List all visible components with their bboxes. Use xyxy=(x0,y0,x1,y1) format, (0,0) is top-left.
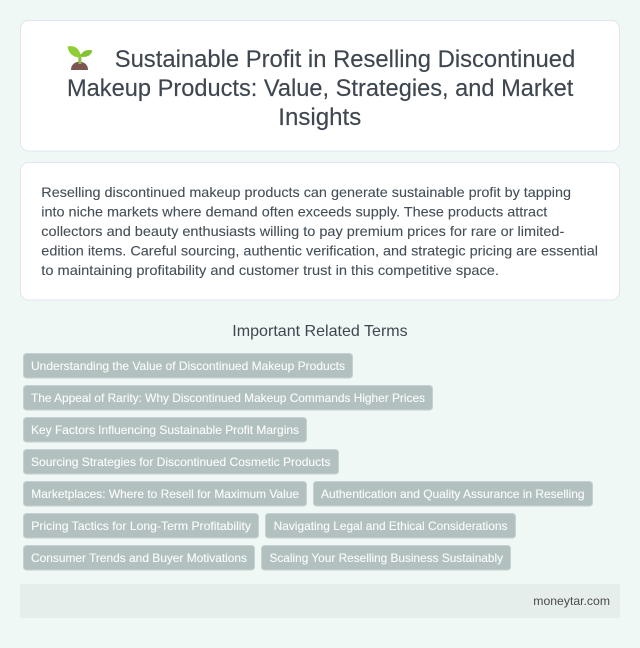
tag xyxy=(24,386,432,410)
tag: The Appeal of Rarity: Why Discontinued Makeup Commands Higher Prices xyxy=(31,391,425,405)
tag: Sourcing Strategies for Discontinued Cosmetic Products xyxy=(31,455,330,469)
heading: title: Sustainable Profit in Reselling Discontinued xyxy=(115,46,575,73)
heading: important related terms: Important Related Terms xyxy=(232,323,408,340)
tag xyxy=(24,450,338,474)
panel: title card xyxy=(20,20,620,151)
footer xyxy=(20,584,620,618)
tag: Key Factors Influencing Sustainable Profit Margins xyxy=(31,423,299,437)
tag: Understanding the Value of Discontinued Makeup Products xyxy=(31,359,345,373)
tag xyxy=(24,354,352,378)
tag xyxy=(266,514,516,538)
tag: Scaling Your Reselling Business Sustainably xyxy=(270,551,503,565)
text block: description: collectors and beauty enthusiasts willing to pay premium prices for rare or limited- xyxy=(41,223,565,239)
tag: Navigating Legal and Ethical Considerations xyxy=(274,519,508,533)
text block: description xyxy=(41,184,598,278)
tag: Marketplaces: Where to Resell for Maximum Value xyxy=(31,487,299,501)
tag: Authentication and Quality Assurance in Reselling xyxy=(321,487,584,501)
heading: title xyxy=(67,46,575,131)
tag: Pricing Tactics for Long-Term Profitability xyxy=(31,519,251,533)
tag xyxy=(24,418,306,442)
footer: moneytar.com xyxy=(533,594,610,608)
tag xyxy=(24,482,306,506)
text block: description: into niche markets where demand often exceeds supply. These products attract xyxy=(41,204,547,220)
heading: title: Makeup Products: Value, Strategies, and Market xyxy=(67,75,574,102)
tag xyxy=(24,546,254,570)
tag xyxy=(262,546,510,570)
text block: description: Reselling discontinued makeup products can generate sustainable profit by tapping xyxy=(41,184,571,200)
heading: title: Insights xyxy=(278,104,361,131)
panel: related term tags xyxy=(24,354,592,570)
panel: description card xyxy=(20,162,620,300)
tag: Consumer Trends and Buyer Motivations xyxy=(31,551,247,565)
text block: description: edition items. Careful sourcing, authentic verification, and strategic pricing are essential xyxy=(41,242,598,258)
tag xyxy=(24,514,258,538)
icon: seedling xyxy=(68,46,92,70)
tag xyxy=(314,482,592,506)
text block: description: to maintaining profitability and customer trust in this competitive space. xyxy=(41,262,499,278)
